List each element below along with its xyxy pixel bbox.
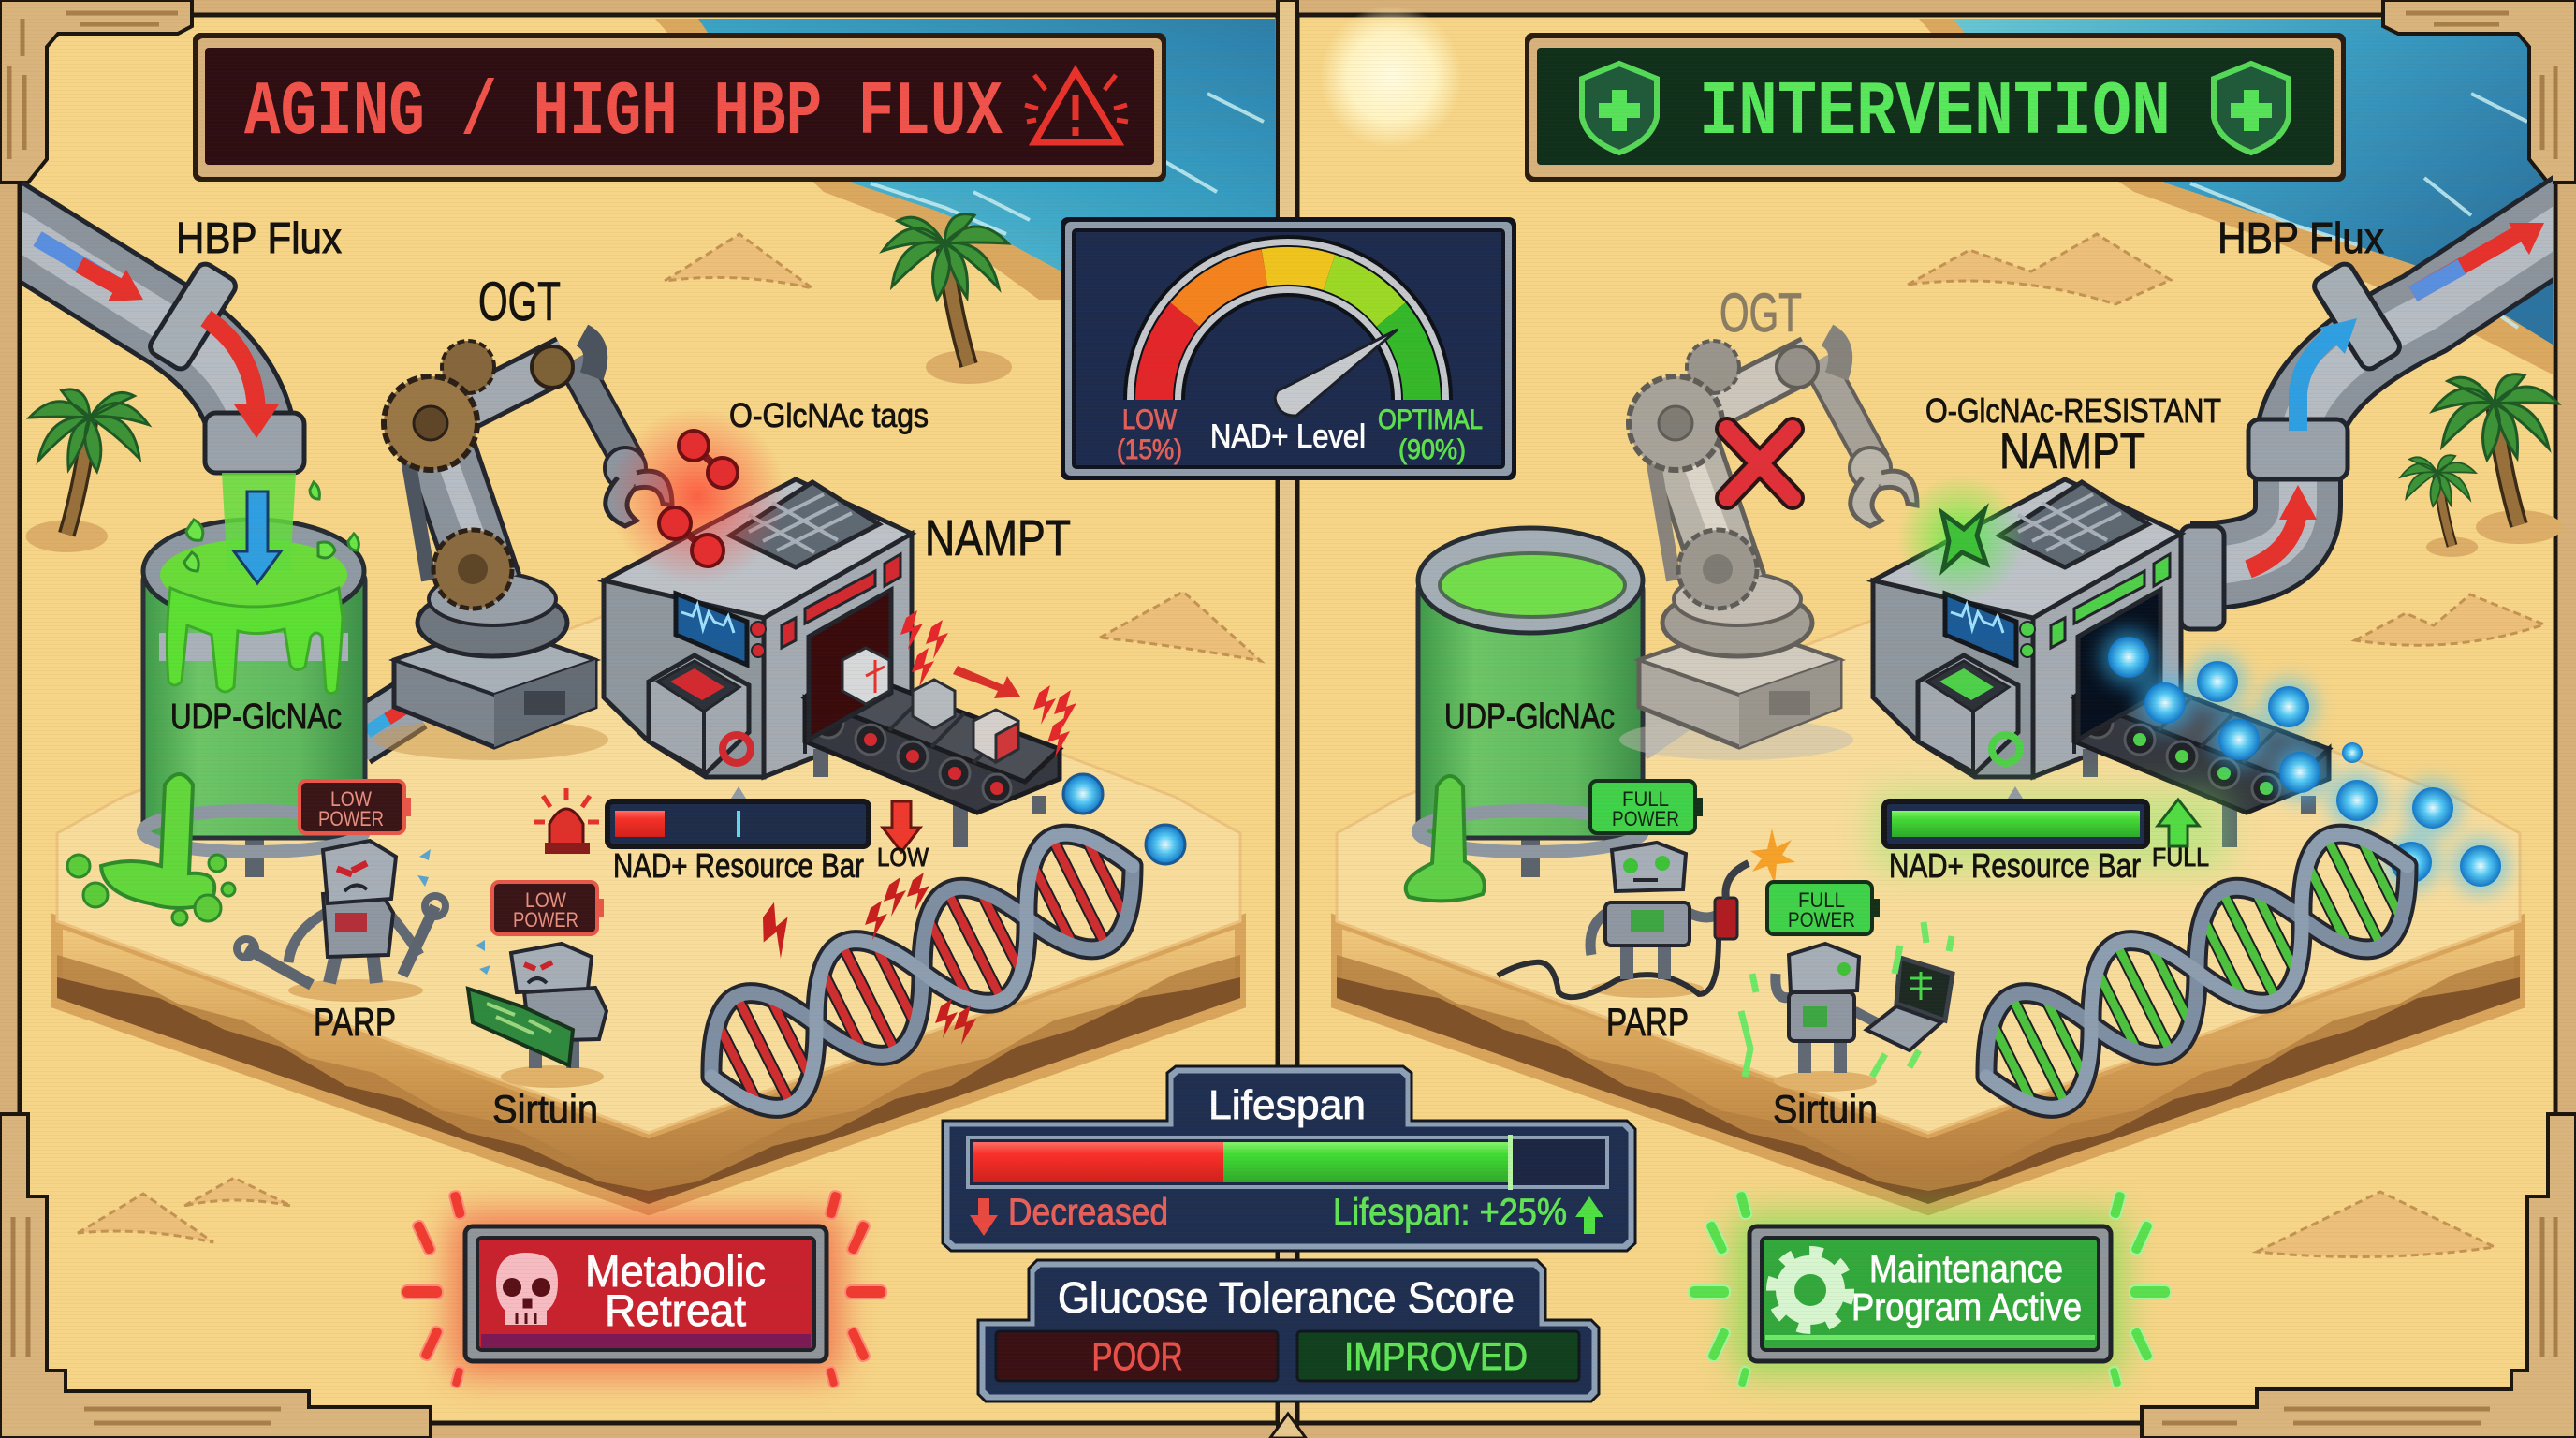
glow: [1872, 791, 2228, 871]
improved box: [1297, 1331, 1579, 1381]
badge: Sirtuin full power: FULL: [1798, 888, 1845, 912]
heading: Lifespan: [1208, 1082, 1366, 1128]
label: lifespan gain: Lifespan: +25%: [1333, 1192, 1567, 1233]
palm tree: lower left scene: [26, 389, 149, 552]
low label: (15%): [1117, 434, 1182, 465]
spill: [101, 774, 214, 908]
label: HBP Flux right: HBP Flux: [2217, 213, 2384, 262]
spill: [1406, 776, 1485, 901]
improved box: IMPROVED: [1344, 1334, 1528, 1378]
badge: PARP full power: [1590, 781, 1703, 833]
arrow: flux in pipe: [37, 239, 122, 288]
pipe under inactive arm: [1633, 704, 1685, 740]
badge: maintenance program: Program Active: [1852, 1285, 2082, 1328]
label: NAD+ Resource Bar: [1889, 846, 2141, 885]
gauge needle: [1275, 330, 1398, 416]
palm tree: right large: [2433, 374, 2562, 544]
machine: NAMPT left: [604, 479, 1060, 847]
arrow: conveyor output: [953, 666, 1020, 698]
panel: glucose tolerance: [978, 1260, 1599, 1401]
island left: [57, 599, 1240, 1210]
island right: [1337, 599, 2520, 1210]
sun: [1320, 6, 1462, 148]
label: Sirtuin left: Sirtuin: [492, 1087, 598, 1131]
icon: shield left: [1582, 64, 1657, 153]
green stream: [222, 473, 296, 571]
label: HBP Flux left: HBP Flux: [176, 213, 342, 262]
label: full: FULL: [2152, 843, 2209, 872]
panel: intervention scene background: [1297, 6, 2555, 1423]
badge: Sirtuin full power: [1767, 882, 1880, 934]
robot: Sirtuin with laptop: [1741, 922, 1953, 1092]
glow: [1732, 1212, 2125, 1376]
gauge label: NAD+ Level: [1210, 418, 1366, 455]
robot: PARP sad: [237, 841, 446, 1002]
low label: LOW: [1122, 404, 1178, 435]
tank: UDP-GlcNAc right: [1406, 528, 1643, 901]
title banner: aging: [193, 33, 1166, 182]
machine opening right: [2078, 590, 2160, 740]
optimal label: OPTIMAL: [1378, 404, 1483, 435]
palm tree: top left scene: [883, 214, 1012, 384]
DNA helix damaged: [711, 834, 1133, 1108]
optimal label: [1378, 404, 1483, 465]
heading: Glucose Tolerance Score: [1058, 1273, 1515, 1322]
bottom center ornament: [1270, 1414, 1306, 1438]
pipe segment from tank to arm base: [356, 704, 412, 740]
damage sparks: [752, 873, 976, 1045]
rays: [1689, 1190, 2171, 1388]
icon: shield right: [2214, 64, 2289, 153]
NAD orbs left: [1063, 774, 1185, 864]
machine: NAMPT right: [1873, 479, 2329, 847]
sparkles: [1741, 922, 1952, 1077]
icon: siren: [534, 788, 599, 854]
badge: PARP full power: FULL: [1622, 787, 1669, 811]
badge: Sirtuin full power: POWER: [1788, 908, 1855, 932]
arrow: low: [883, 801, 920, 852]
dunes: [1908, 234, 2544, 1256]
NAD resource bar right: [1872, 786, 2228, 885]
robot arm: OGT inactive: [1619, 335, 1917, 760]
badge: metabolic retreat: [402, 1190, 886, 1388]
machine opening left: [809, 590, 891, 740]
label: UDP-GlcNAc: [1444, 697, 1615, 737]
bar marker: [1508, 1135, 1513, 1190]
label: low: LOW: [877, 843, 929, 872]
laptop: [1896, 958, 1953, 1020]
panel: NAD+ gauge: [1061, 217, 1516, 480]
gear teeth: [1772, 1252, 1849, 1328]
low label: [1117, 404, 1182, 465]
sparks: [900, 610, 1076, 757]
badge: Sirtuin low power: POWER: [513, 908, 578, 932]
dripping slime: [167, 588, 343, 694]
label: PARP left: PARP: [314, 1000, 396, 1044]
NAD resource bar left: [534, 786, 929, 885]
center divider: [1278, 0, 1297, 1438]
O-GlcNAc molecules: [608, 407, 786, 585]
ocean left: [655, 19, 1275, 300]
icon: warning triangle: [1025, 71, 1128, 142]
cable: [1498, 939, 1719, 997]
label: OGT inactive: OGT: [1720, 283, 1802, 344]
text: Metabolic: [585, 1246, 766, 1296]
poor box: [996, 1331, 1278, 1381]
label: O-GlcNAc-RESISTANT: O-GlcNAc-RESISTANT: [1925, 391, 2221, 430]
label: decreased: Decreased: [1008, 1192, 1168, 1233]
label: NAD+ Resource Bar: [613, 846, 864, 885]
torch: [1715, 898, 1737, 939]
pipe: HBP flux outlet right: [2181, 209, 2576, 629]
robot arm: OGT active: [374, 335, 672, 760]
label: NAMPT right: NAMPT: [1999, 423, 2145, 479]
DNA helix healthy: [1986, 834, 2408, 1108]
badge: Sirtuin low power: [492, 882, 604, 934]
resistant enzyme icon: [1897, 475, 2025, 602]
title text: AGING / HIGH HBP FLUX: [244, 69, 1003, 156]
panel: lifespan: [943, 1066, 1635, 1251]
bar: green segment: [1223, 1142, 1510, 1182]
gauge segments: [1154, 266, 1422, 400]
palm tree: right small: [2400, 455, 2478, 557]
bar track: [968, 1137, 1607, 1187]
robot: PARP repairing: [1498, 829, 1795, 998]
panel: aging scene background: [20, 15, 1278, 1423]
badge: metabolic retreat: Retreat: [605, 1285, 746, 1335]
text: Maintenance: [1869, 1247, 2063, 1290]
arrow: flux out: [2413, 234, 2518, 294]
badge: Sirtuin low power: LOW: [525, 888, 566, 912]
label: Sirtuin right: Sirtuin: [1773, 1087, 1878, 1131]
icon: red X: [1727, 429, 1793, 498]
gauge ring: [1154, 266, 1422, 400]
badge: PARP low power: POWER: [318, 807, 384, 830]
poor box: POOR: [1091, 1334, 1183, 1378]
arrow: down: [970, 1198, 998, 1236]
arrow: blue up: [2298, 337, 2331, 431]
wrenches: [246, 906, 435, 985]
circuit board: [468, 989, 573, 1065]
badge: PARP low power: [300, 781, 411, 833]
arrow: flow into tank: [234, 492, 281, 583]
arrow: up: [1575, 1196, 1603, 1234]
optimal label: (90%): [1398, 434, 1466, 465]
tank: UDP-GlcNAc left: [67, 473, 365, 925]
label: OGT: OGT: [478, 271, 561, 332]
label: PARP right: PARP: [1606, 1000, 1689, 1044]
slime droplets: [184, 482, 359, 571]
rays: [402, 1190, 886, 1388]
arrow: flux down pipe: [206, 318, 279, 438]
label: NAMPT left: NAMPT: [925, 510, 1071, 566]
spill blobs: [67, 855, 235, 925]
robot: Sirtuin sad: [468, 940, 607, 1088]
arrow: red lower: [2248, 513, 2298, 569]
red X inner: [1727, 429, 1793, 498]
conveyor cubes left: [842, 648, 1018, 762]
title banner: intervention: [1525, 33, 2346, 182]
title text: INTERVENTION: [1699, 69, 2171, 156]
bar: red segment: [973, 1142, 1223, 1182]
label: UDP-GlcNAc: [170, 697, 342, 737]
dunes: [78, 234, 1261, 1242]
icon: gear: [1785, 1265, 1836, 1315]
pipe: HBP flux inlet left: [0, 219, 304, 473]
badge: PARP full power: POWER: [1612, 807, 1679, 830]
glow: [449, 1212, 842, 1376]
arrow: full: [2158, 800, 2199, 846]
icon: skull: [496, 1253, 558, 1325]
label: O-GlcNAc tags: O-GlcNAc tags: [729, 396, 929, 434]
ocean right: [1919, 19, 2553, 374]
badge: PARP low power: LOW: [330, 787, 372, 811]
badge: maintenance program: [1689, 1190, 2171, 1388]
NAD orbs right: [2100, 629, 2509, 894]
